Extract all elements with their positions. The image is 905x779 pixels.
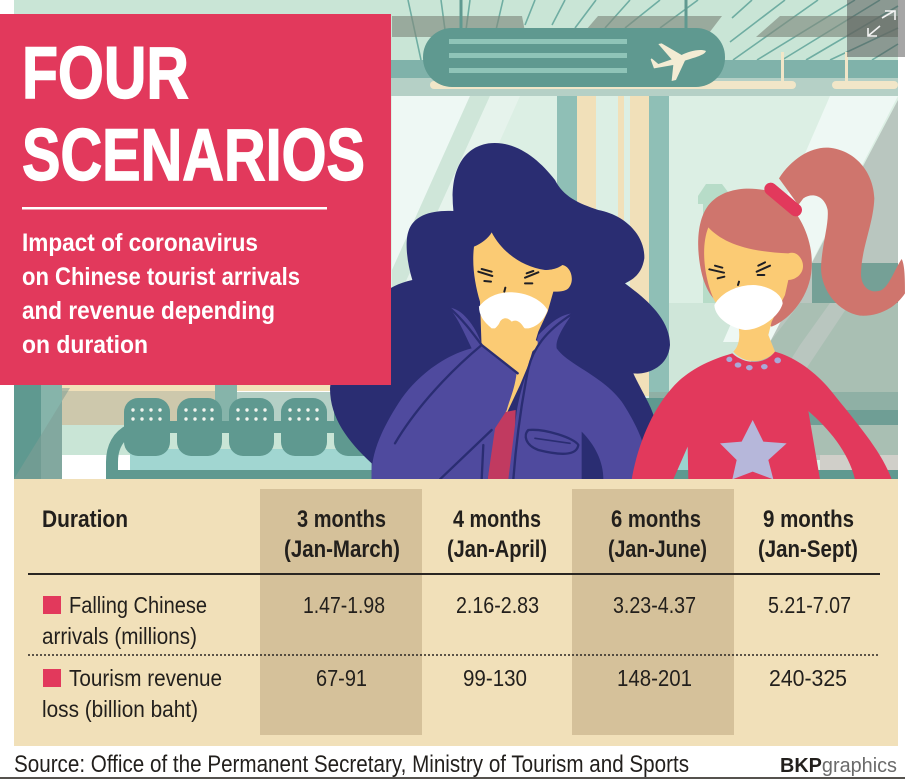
row: falling Chinese arrivals: arrivals (millions)	[42, 623, 197, 649]
table header: (Jan-April)	[447, 536, 547, 563]
floor strip	[380, 470, 898, 479]
table header: Duration	[42, 506, 128, 533]
subtitle text: and revenue depending	[22, 297, 275, 325]
panel: title block	[0, 14, 391, 385]
title: FOUR	[22, 33, 189, 114]
row: falling Chinese arrivals: Falling Chinese	[69, 592, 207, 618]
title: SCENARIOS	[22, 115, 365, 196]
source note: Source: Office of the Permanent Secretary, Ministry of Tourism and Sports	[14, 751, 689, 778]
panel: data table	[14, 479, 898, 746]
row: falling Chinese arrivals: 2.16-2.83	[456, 592, 539, 618]
row: tourism revenue loss: 67-91	[316, 665, 367, 691]
illustration: woman with long dark hair coughing	[330, 143, 670, 479]
row: falling Chinese arrivals: 3.23-4.37	[613, 592, 696, 618]
bench	[106, 398, 396, 479]
table header: 9 months	[763, 506, 854, 533]
row: tourism revenue loss	[42, 665, 847, 722]
subtitle text: Impact of coronavirus	[22, 229, 258, 257]
row: falling Chinese arrivals: 1.47-1.98	[303, 592, 385, 618]
row: tourism revenue loss: 148-201	[617, 665, 692, 691]
table header: 6 months	[611, 506, 701, 533]
row: tourism revenue loss: 240-325	[769, 665, 847, 691]
row: tourism revenue loss: loss (billion baht)	[42, 696, 198, 722]
credit: BKP graphics: BKPgraphics	[780, 755, 897, 777]
icon: expand control	[847, 0, 905, 57]
subtitle text: on Chinese tourist arrivals	[22, 263, 300, 291]
table header: (Jan-Sept)	[758, 536, 858, 563]
table header: 4 months	[453, 506, 541, 533]
subtitle text: on duration	[22, 331, 148, 359]
table header: (Jan-June)	[608, 536, 707, 563]
illustration: woman with ponytail	[632, 148, 905, 479]
row: falling Chinese arrivals	[42, 592, 851, 649]
table header	[42, 506, 858, 563]
row: tourism revenue loss: 99-130	[463, 665, 527, 691]
table header: 3 months	[297, 506, 386, 533]
row: falling Chinese arrivals: 5.21-7.07	[768, 592, 851, 618]
subtitle text	[22, 229, 300, 359]
panel: airport background illustration	[14, 0, 898, 479]
title	[22, 33, 365, 196]
icon: departures sign with plane	[423, 28, 725, 87]
row: tourism revenue loss: Tourism revenue	[69, 665, 222, 691]
table header: (Jan-March)	[284, 536, 400, 563]
